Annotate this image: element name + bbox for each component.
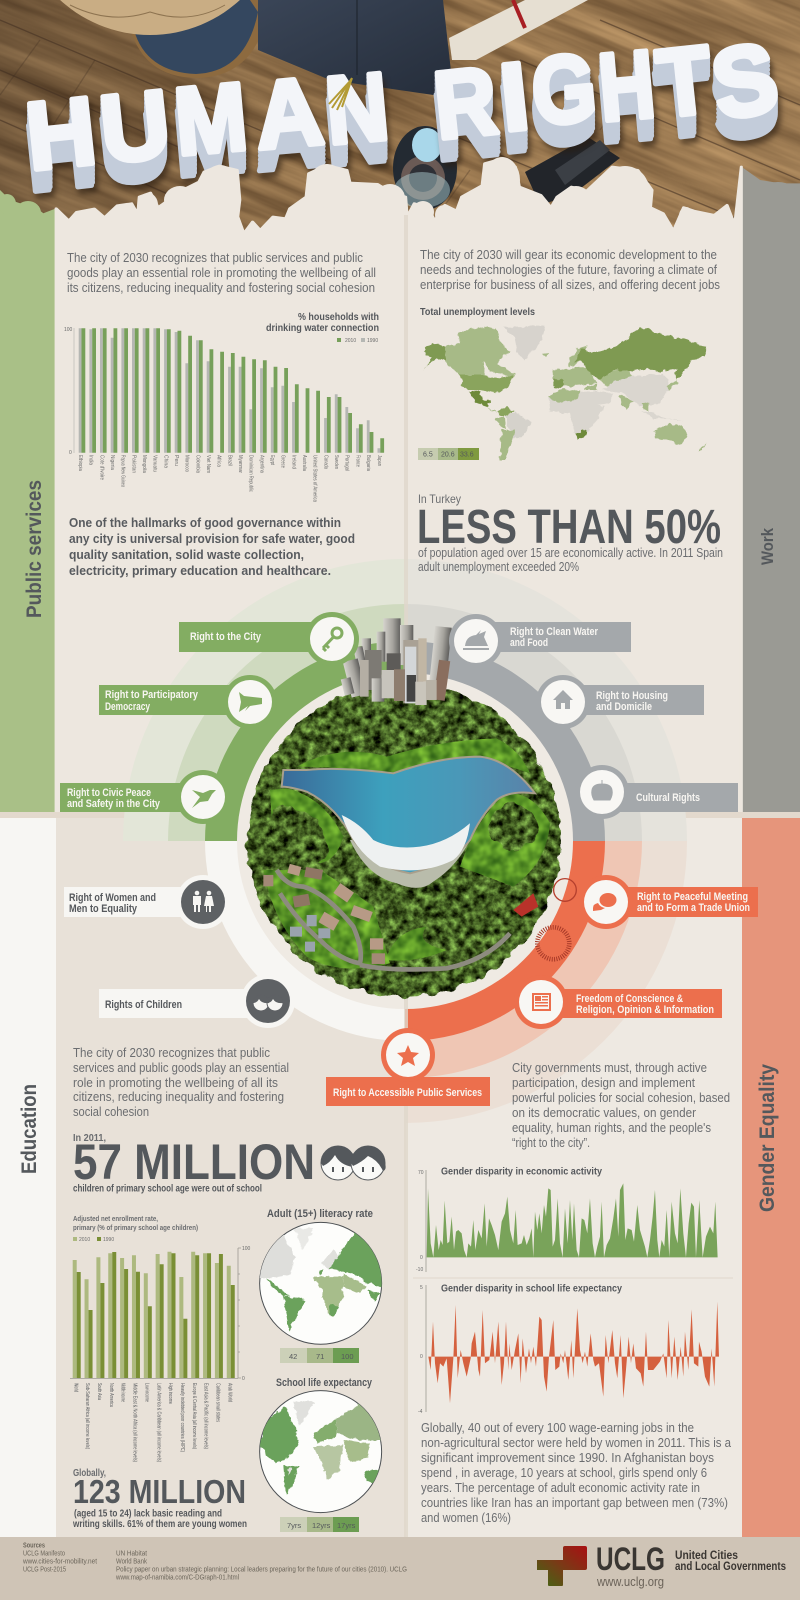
right: women and men equality: [64, 875, 230, 929]
text: education intro: [73, 1045, 289, 1119]
bar chart: households with drinking water connection: [64, 311, 384, 502]
green crowd heads: [0, 194, 41, 225]
stat: 123 million: writing skills. 61% of them are young women: [72, 1518, 247, 1530]
legend: [280, 1517, 359, 1532]
logo: UCLG: UCLG: [596, 1541, 665, 1577]
heading: work: Work: [758, 528, 777, 565]
crowd heads: [70, 157, 693, 231]
lower panels: [0, 812, 800, 1537]
text: governance statement: quality sanitation, solid waste collection,: [69, 547, 304, 562]
country labels: Cote d'Ivoire: [98, 455, 104, 480]
bar chart: households with drinking water connection: 0: [69, 450, 72, 456]
country labels: Viet Nam: [205, 455, 211, 473]
right: women and men equality: Men to Equality: [69, 903, 137, 915]
right: peaceful meeting: [579, 875, 758, 929]
chart title: [266, 311, 379, 334]
country labels: China: [162, 455, 168, 468]
country labels: Australia: [301, 455, 307, 471]
globe: adult literacy rate: Adult (15+) literacy rate: [267, 1208, 373, 1220]
region labels: Latin America & Caribbean (all income levels): [155, 1383, 161, 1462]
text: gender equality statistics: significant improvement since 1990. In Afghanistan boys: [421, 1450, 714, 1465]
legend: 12yrs: [312, 1521, 331, 1530]
right: participatory democracy: Democracy: [105, 701, 150, 713]
text: education intro: The city of 2030 recognizes that public: [73, 1045, 271, 1060]
icon: megaphone: [239, 692, 262, 712]
logo: UCLG: [537, 1541, 786, 1589]
title: [21, 21, 786, 191]
title: N: [321, 53, 393, 165]
grey crowd heads: [758, 182, 798, 210]
text: gender equality statistics: years. The percentage of adult economic activity rate in: [421, 1480, 700, 1495]
country labels: Papua New Guinea: [120, 455, 126, 487]
right: clean water and food: [449, 614, 631, 668]
text: gender equality intro: powerful policies for social cohesion, based: [512, 1090, 730, 1105]
text: gender equality statistics: and women (16%): [421, 1510, 511, 1525]
text: gender equality statistics: Globally, 40 out of every 100 wage-earning jobs in the: [421, 1420, 694, 1435]
village clearing: [263, 870, 390, 969]
chart legend: 1990: [367, 338, 378, 344]
area chart: gender disparity in school life expectancy: Gender disparity in school life expectancy: [441, 1284, 622, 1294]
sources: UN Habitat: [116, 1550, 147, 1558]
stat: 123 million: Globally,: [73, 1467, 106, 1479]
country labels: Ethiopia: [77, 455, 83, 471]
right: freedom of conscience: [514, 975, 722, 1029]
text: education intro: social cohesion: [73, 1104, 149, 1119]
chart title: % households with: [298, 311, 379, 323]
panel: gender equality background: [406, 815, 742, 1537]
region labels: Arab World: [226, 1383, 232, 1402]
right: right to the city: [179, 612, 359, 666]
text: public services intro: The city of 2030 recognizes that public services and public: [67, 250, 364, 265]
icon: house: [553, 690, 573, 709]
stat: less than 50%: of population aged over 15 are economically active. In 2011 Spain: [418, 546, 723, 560]
panel: work side strip top: [741, 167, 800, 812]
strip divider: [0, 812, 800, 818]
legend: 100: [341, 1352, 354, 1361]
text: gender equality intro: “right to the city”.: [512, 1135, 590, 1150]
right: housing and domicile: [536, 675, 704, 729]
text: gender equality intro: participation, design and implement: [512, 1075, 695, 1090]
right: accessible public services: Right to Accessible Public Services: [333, 1087, 482, 1099]
stat: less than 50%: adult unemployment exceeded 20%: [418, 560, 579, 574]
bar chart: enrollment rate: 0: [242, 1376, 245, 1382]
region labels: North America: [108, 1383, 114, 1407]
chart legend: [337, 338, 378, 344]
globe: adult literacy rate: [257, 1208, 385, 1363]
region labels: Middle East & North Africa (all income levels): [132, 1383, 138, 1462]
panel: paper crowd: [56, 158, 741, 812]
right: right to the city: Right to the City: [190, 631, 261, 643]
stat: 57 million: In 2011,: [73, 1132, 106, 1144]
right: accessible public services: [326, 1028, 490, 1106]
area chart: gender disparity in economic activity: 70: [418, 1170, 424, 1176]
right: cultural rights: Cultural Rights: [636, 792, 700, 804]
right: women and men equality: Right of Women and: [69, 892, 156, 904]
region labels: Low income: [143, 1383, 149, 1402]
page seam: [404, 215, 408, 1537]
text: gender equality intro: on its democratic values, on gender: [512, 1105, 697, 1120]
country labels: Colombia: [194, 455, 200, 473]
legend: [280, 1348, 359, 1363]
area chart: gender disparity in school life expectancy: 0: [420, 1354, 423, 1360]
bars 2010: [82, 328, 384, 453]
title: T: [652, 25, 717, 138]
sources: World Bank: [116, 1558, 147, 1566]
region labels: [72, 1383, 232, 1462]
right: rights of children: [99, 974, 295, 1028]
map title: Total unemployment levels: [420, 306, 535, 318]
text: gender equality statistics: spend , in average, 10 years at school, girls spend only 6: [421, 1465, 707, 1480]
concentric rings: [123, 559, 687, 1123]
heading: gender equality: Gender Equality: [756, 1064, 779, 1212]
region labels: High income: [167, 1383, 173, 1404]
area chart: gender disparity in economic activity: Gender disparity in economic activity: [441, 1166, 602, 1178]
bar chart: enrollment rate: 100: [242, 1246, 251, 1252]
bar chart: enrollment rate: [70, 1214, 251, 1462]
country labels: France: [354, 455, 360, 467]
legend: 71: [316, 1352, 324, 1361]
country labels: Africa: [216, 455, 222, 467]
title: A: [251, 58, 328, 170]
icon: roast chicken: [463, 630, 489, 650]
stat: 123 million: [72, 1467, 247, 1530]
area chart: gender disparity in school life expectancy: 5: [420, 1285, 423, 1291]
stat: 123 million: 123 MILLION: [73, 1473, 246, 1510]
foam: [342, 815, 470, 870]
area chart: gender disparity in economic activity: [416, 1166, 718, 1273]
country labels: United States of America: [312, 455, 318, 502]
legend: 17yrs: [337, 1521, 356, 1530]
icon: graduation cap: [258, 0, 454, 98]
text: education intro: services and public goods play an essential: [73, 1060, 289, 1075]
country labels: Japan: [376, 455, 382, 466]
sources: www.cities-for-mobility.net: [22, 1558, 97, 1566]
legend: 7yrs: [287, 1521, 301, 1530]
region labels: South Asia: [96, 1383, 102, 1400]
country labels: Portugal: [344, 455, 350, 471]
divider between area charts: [413, 1278, 733, 1279]
country labels: Brazil: [226, 455, 232, 466]
map: total unemployment levels: [418, 306, 707, 460]
icon: newspaper: [532, 993, 551, 1011]
skyline: [341, 618, 452, 705]
panel: education side strip: [0, 818, 56, 1537]
region labels: Caribbean small states: [214, 1383, 220, 1422]
text: public services intro: its citizens, reducing inequality and fostering social cohesion: [67, 280, 375, 295]
country labels: Bulgaria: [365, 455, 371, 471]
region labels: East Asia & Pacific (all income levels): [203, 1383, 209, 1449]
heading: education: Education: [18, 1084, 41, 1174]
region labels: Heavily indebted poor countries (HIPC): [179, 1383, 185, 1452]
country labels: India: [88, 455, 94, 465]
text: work intro: The city of 2030 will gear its economic development to the: [420, 247, 717, 262]
text: gender equality statistics: countries like Iran has an important gap between men (73%): [421, 1495, 728, 1510]
stat: less than 50%: In Turkey: [418, 492, 461, 506]
stat: less than 50%: [417, 492, 723, 574]
panel: public services side strip: [0, 190, 56, 812]
title: G: [527, 33, 601, 145]
bars 2010: [73, 1252, 231, 1378]
text: gender equality intro: [512, 1060, 730, 1150]
text: governance statement: One of the hallmarks of good governance within: [69, 515, 341, 530]
globe: school life expectancy: [258, 1377, 383, 1532]
lake: [282, 757, 535, 873]
right: housing and domicile: and Domicile: [596, 701, 652, 713]
sources: Sources: [23, 1542, 45, 1550]
sand: [350, 840, 470, 888]
stat: 57 million: 57 MILLION: [73, 1134, 315, 1190]
area chart: gender disparity in economic activity: -10: [416, 1267, 423, 1273]
icon: children faces: [253, 995, 283, 1011]
upper meadow: [297, 738, 530, 773]
panel: education background: [56, 815, 406, 1537]
logo: UCLG: United Cities: [675, 1548, 738, 1562]
planet forest base: [248, 683, 561, 997]
text: governance statement: electricity, primary education and healthcare.: [69, 563, 331, 578]
logo: UCLG: www.uclg.org: [596, 1574, 664, 1589]
right: freedom of conscience: Freedom of Conscience &: [576, 993, 683, 1005]
right: civic peace and safety: and Safety in the City: [67, 798, 160, 810]
map legend: 33.6: [460, 452, 474, 458]
country labels: Myanmar: [237, 455, 243, 473]
title: S: [703, 21, 786, 141]
icon: diploma scroll: [449, 0, 588, 60]
text: work intro: needs and technologies of the future, favoring a climate of: [420, 262, 717, 277]
country labels: Vanuatu: [152, 455, 158, 472]
region labels: Sub-Saharan Africa (all income levels): [84, 1383, 90, 1449]
text: public services intro: [67, 250, 376, 295]
chart legend: 1990: [103, 1237, 114, 1243]
area chart: gender disparity in economic activity: 0: [420, 1255, 423, 1261]
icon: man and woman: [193, 891, 214, 912]
text: education intro: citizens, reducing inequality and fostering: [73, 1089, 284, 1104]
text: work intro: [420, 247, 720, 292]
footer: [0, 1537, 800, 1600]
country labels: Peru: [173, 455, 179, 466]
text: work intro: enterprise for business of all sizes, and offering decent jobs: [420, 277, 720, 292]
map legend: 20.6: [441, 452, 455, 458]
stat: less than 50%: LESS THAN 50%: [417, 501, 721, 554]
country labels: Nigeria: [109, 455, 115, 470]
icon: cap tassel: [329, 78, 352, 110]
legend: 42: [289, 1352, 297, 1361]
area chart: gender disparity in school life expectancy: -4: [418, 1409, 423, 1415]
country labels: Pakistan: [130, 455, 136, 473]
country labels: Morocco: [184, 455, 190, 472]
panel: gender equality side strip: [742, 818, 800, 1537]
icon: water bottle: [393, 126, 457, 210]
title: U: [95, 70, 175, 184]
region labels: World: [72, 1383, 78, 1392]
globe: school life expectancy: School life expectancy: [276, 1377, 373, 1389]
sources: [22, 1542, 407, 1582]
right hill meadow: [460, 793, 550, 887]
stat: 123 million: (aged 15 to 24) lack basic reading and: [74, 1508, 222, 1520]
text: public services intro: goods play an essential role in promoting the wellbeing of all: [67, 265, 376, 280]
right: clean water and food: Right to Clean Water: [510, 626, 599, 638]
right: rights of children: Rights of Children: [105, 999, 182, 1011]
text: gender equality statistics: [421, 1420, 732, 1525]
icon: two children heads: [321, 1146, 386, 1180]
right: civic peace and safety: [60, 770, 230, 824]
area chart: gender disparity in school life expectancy: [418, 1284, 719, 1415]
title: H: [594, 30, 659, 142]
ferris wheel: [537, 927, 569, 959]
text: governance statement: [69, 515, 355, 578]
icon: hummingbird: [192, 790, 216, 808]
stat: 57 million: children of primary school age were out of school: [73, 1184, 262, 1194]
icon: star: [397, 1045, 419, 1066]
text: gender equality intro: City governments must, through active: [512, 1060, 707, 1075]
title: I: [495, 42, 534, 151]
text: governance statement: any city is universal provision for safe water, good: [69, 531, 355, 546]
chart title: [73, 1214, 198, 1232]
region labels: Middle income: [120, 1383, 126, 1402]
country labels: Greece: [280, 455, 286, 468]
icon: key: [323, 628, 342, 651]
right: participatory democracy: [99, 675, 277, 729]
roller coaster: [554, 879, 576, 901]
country labels: Argentina: [258, 455, 264, 473]
map legend: [418, 448, 479, 460]
sources: UCLG Post-2015: [23, 1566, 66, 1574]
country labels: Egypt: [269, 455, 275, 465]
title: R: [429, 47, 502, 160]
sources: www.map-of-namibia.com/C-DGraph-01.html: [115, 1574, 239, 1582]
sources: Policy paper on urban strategic planning: Local leaders preparing for the future of our cities (2010). UCLG: [116, 1566, 407, 1574]
region labels: Europe & Central Asia (all income levels): [191, 1383, 197, 1449]
title: H: [21, 77, 101, 191]
bars 1990: [77, 1252, 235, 1378]
country labels: Mongolia: [141, 455, 147, 473]
chart legend: 2010: [345, 338, 356, 344]
planet illustration: [248, 618, 576, 997]
right: peaceful meeting: Right to Peaceful Meeting: [637, 891, 748, 903]
text: gender equality intro: equality, human rights, and the people's: [512, 1120, 711, 1135]
heading: public services: Public services: [23, 480, 46, 618]
icon: crown: [592, 780, 612, 800]
chart title: drinking water connection: [266, 322, 379, 334]
lower forest meadow patches: [387, 927, 447, 961]
right: civic peace and safety: Right to Civic Peace: [67, 787, 151, 799]
country labels: Canada: [322, 455, 328, 469]
text: gender equality statistics: non-agricultural sector were held by women in 2011. This is a: [421, 1435, 732, 1450]
red building: [513, 893, 538, 917]
chart title: primary (% of primary school age children): [73, 1223, 198, 1232]
crowd silhouette paper edge: [0, 157, 800, 812]
title: M: [170, 63, 252, 176]
bars 1990: [79, 328, 380, 453]
header photo: wood desk with objects: [0, 0, 800, 230]
right: freedom of conscience: Religion, Opinion & Information: [576, 1004, 714, 1016]
right: cultural rights: [575, 765, 738, 819]
bar chart: households with drinking water connection: 100: [64, 327, 73, 333]
left hill meadow: [270, 788, 343, 863]
right: participatory democracy: Right to Participatory: [105, 689, 198, 701]
icon: speech bubbles: [593, 893, 616, 911]
chart legend: [73, 1237, 114, 1243]
country labels: [77, 455, 382, 502]
right: peaceful meeting: and to Form a Trade Union: [637, 902, 750, 914]
chart title: Adjusted net enrollment rate,: [73, 1214, 158, 1223]
icon: globe on stand: [60, 0, 258, 78]
map legend: 6.5: [423, 452, 433, 458]
country labels: Sweden: [333, 455, 339, 469]
sources: UCLG Manifesto: [23, 1550, 65, 1558]
right: housing and domicile: Right to Housing: [596, 690, 668, 702]
world map shapes: [423, 327, 707, 460]
chart legend: 2010: [79, 1237, 90, 1243]
icon: camera: [525, 137, 620, 205]
country labels: Dominican Republic: [248, 455, 254, 492]
right: clean water and food: and Food: [510, 637, 548, 649]
country labels: Ireland: [290, 455, 296, 469]
text: education intro: role in promoting the wellbeing of all its: [73, 1075, 278, 1090]
